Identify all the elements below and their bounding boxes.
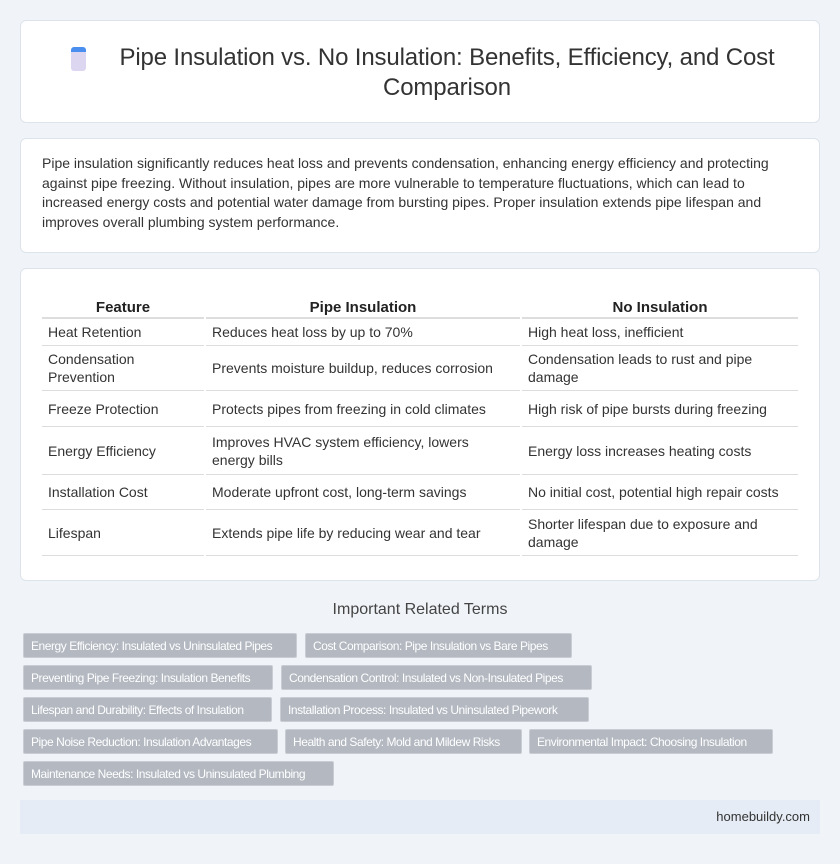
comparison table: High risk of pipe bursts during freezing: [528, 400, 767, 416]
header card: [20, 20, 820, 123]
comparison table: Lifespan: [48, 524, 101, 540]
related terms tags: Pipe Noise Reduction: Insulation Advantages: [31, 735, 251, 749]
comparison table: Feature: [96, 298, 150, 316]
related terms tags: Energy Efficiency: Insulated vs Uninsulated Pipes: [31, 639, 272, 653]
title: Pipe Insulation vs. No Insulation: Benefits, Efficiency, and Cost Comparison: [119, 44, 775, 101]
related terms tags: Maintenance Needs: Insulated vs Uninsulated Plumbing: [31, 767, 305, 781]
comparison table: Shorter lifespan due to exposure and damage: [528, 516, 758, 550]
related terms tags: Health and Safety: Mold and Mildew Risks: [293, 735, 500, 749]
comparison table: Installation Cost: [48, 484, 148, 500]
comparison table: Reduces heat loss by up to 70%: [212, 324, 413, 340]
related terms tags: Preventing Pipe Freezing: Insulation Benefits: [31, 671, 250, 685]
comparison table: Improves HVAC system efficiency, lowers energy bills: [212, 434, 469, 468]
comparison table: Energy Efficiency: [48, 442, 156, 458]
comparison table: High heat loss, inefficient: [528, 324, 683, 340]
comparison table: No Insulation: [612, 298, 708, 316]
footer: [20, 800, 820, 834]
comparison table: No initial cost, potential high repair costs: [528, 484, 779, 500]
footer source text: homebuildy.com: [716, 809, 810, 824]
related terms tags: Installation Process: Insulated vs Uninsulated Pipework: [288, 703, 557, 717]
icon: building: [71, 47, 86, 71]
related terms tags: Cost Comparison: Pipe Insulation vs Bare Pipes: [313, 639, 548, 653]
intro paragraph: Pipe insulation significantly reduces heat loss and prevents condensation, enhancing energy efficiency and protecting against pipe freezing. Without insulation, pipes are more vulnerable to temperature fluctuations, which can lead to increased energy costs and potential water damage from bursting pipes. Proper insulation extends pipe lifespan and improves overall plumbing system performance.: [42, 155, 769, 230]
comparison table: Prevents moisture buildup, reduces corrosion: [212, 360, 493, 376]
comparison table: Extends pipe life by reducing wear and tear: [212, 524, 480, 540]
intro text card: [20, 138, 820, 253]
comparison table: Energy loss increases heating costs: [528, 442, 751, 458]
comparison table: Moderate upfront cost, long-term savings: [212, 484, 466, 500]
comparison table: Freeze Protection: [48, 400, 158, 416]
comparison table: Condensation leads to rust and pipe damage: [528, 351, 752, 385]
related terms tags: Environmental Impact: Choosing Insulation: [537, 735, 747, 749]
comparison table: [42, 298, 798, 556]
comparison table: Condensation Prevention: [48, 351, 134, 385]
related terms tags: [23, 633, 773, 786]
comparison table: Protects pipes from freezing in cold climates: [212, 400, 486, 416]
related terms tags: Lifespan and Durability: Effects of Insulation: [31, 703, 244, 717]
related terms tags: Condensation Control: Insulated vs Non-Insulated Pipes: [289, 671, 563, 685]
related terms heading: Important Related Terms: [333, 601, 507, 618]
comparison table card: [20, 268, 820, 581]
comparison table: Pipe Insulation: [310, 298, 416, 316]
comparison table: Heat Retention: [48, 324, 141, 340]
